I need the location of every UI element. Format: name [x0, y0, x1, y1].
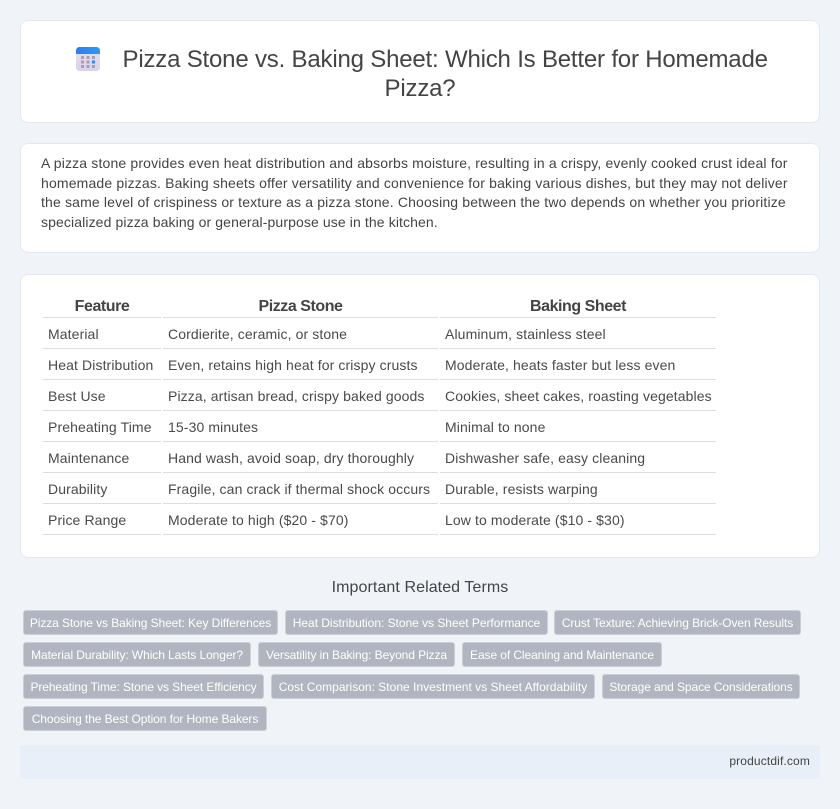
comparison table: Feature: [75, 298, 129, 315]
description text: specialized pizza baking or general-purpose use in the kitchen.: [41, 214, 438, 230]
comparison table: Even, retains high heat for crispy crusts: [168, 357, 418, 373]
comparison table: Hand wash, avoid soap, dry thoroughly: [168, 450, 414, 466]
icon: calendar: [76, 47, 100, 71]
comparison table: Price Range: [48, 512, 126, 528]
comparison table: Moderate to high ($20 - $70): [168, 512, 349, 528]
related term tags: Preheating Time: Stone vs Sheet Efficiency: [30, 680, 257, 694]
related term tags: Material Durability: Which Lasts Longer?: [31, 648, 243, 662]
description text: homemade pizzas. Baking sheets offer versatility and convenience for baking various dishes, but they may not deliver: [41, 175, 788, 191]
description card: [20, 143, 820, 253]
description text: the same level of crispiness or texture as a pizza stone. Choosing between the two depends on whether you prioritize: [41, 194, 786, 210]
related term tags: Choosing the Best Option for Home Bakers: [32, 712, 258, 726]
comparison table: [43, 298, 716, 535]
comparison table: Pizza Stone: [259, 298, 342, 315]
description text: [41, 155, 788, 230]
related term tags: Storage and Space Considerations: [609, 680, 793, 694]
heading: [122, 46, 768, 102]
comparison table: Preheating Time: [48, 419, 152, 435]
comparison table: Maintenance: [48, 450, 129, 466]
related term tags: [23, 610, 801, 731]
comparison table: Material: [48, 326, 99, 342]
comparison table: Durability: [48, 481, 107, 497]
comparison table: Fragile, can crack if thermal shock occurs: [168, 481, 430, 497]
related term tags: Heat Distribution: Stone vs Sheet Performance: [293, 616, 540, 630]
header card: [20, 20, 820, 123]
comparison table: 15-30 minutes: [168, 419, 258, 435]
comparison table: Heat Distribution: [48, 357, 153, 373]
comparison table: Moderate, heats faster but less even: [445, 357, 675, 373]
footer source: productdif.com: [729, 754, 810, 768]
related term tags: Pizza Stone vs Baking Sheet: Key Differences: [30, 616, 271, 630]
comparison table: Best Use: [48, 388, 106, 404]
heading: Pizza Stone vs. Baking Sheet: Which Is Better for Homemade: [122, 46, 768, 73]
description text: A pizza stone provides even heat distribution and absorbs moisture, resulting in a crispy, evenly cooked crust ideal for: [41, 155, 788, 171]
related term tags: Cost Comparison: Stone Investment vs Sheet Affordability: [279, 680, 587, 694]
footer: [20, 745, 820, 779]
comparison table: Aluminum, stainless steel: [445, 326, 606, 342]
comparison table: Baking Sheet: [530, 298, 626, 315]
comparison table: Minimal to none: [445, 419, 545, 435]
related terms heading: Important Related Terms: [332, 579, 508, 596]
comparison table: Pizza, artisan bread, crispy baked goods: [168, 388, 425, 404]
comparison table: Dishwasher safe, easy cleaning: [445, 450, 645, 466]
related term tags: Versatility in Baking: Beyond Pizza: [266, 648, 447, 662]
comparison table: Cordierite, ceramic, or stone: [168, 326, 347, 342]
comparison table: Durable, resists warping: [445, 481, 598, 497]
comparison table: Cookies, sheet cakes, roasting vegetables: [445, 388, 712, 404]
comparison table: Low to moderate ($10 - $30): [445, 512, 625, 528]
related term tags: Crust Texture: Achieving Brick-Oven Results: [562, 616, 793, 630]
related term tags: Ease of Cleaning and Maintenance: [470, 648, 654, 662]
heading: Pizza?: [385, 75, 455, 102]
table card: [20, 274, 820, 558]
